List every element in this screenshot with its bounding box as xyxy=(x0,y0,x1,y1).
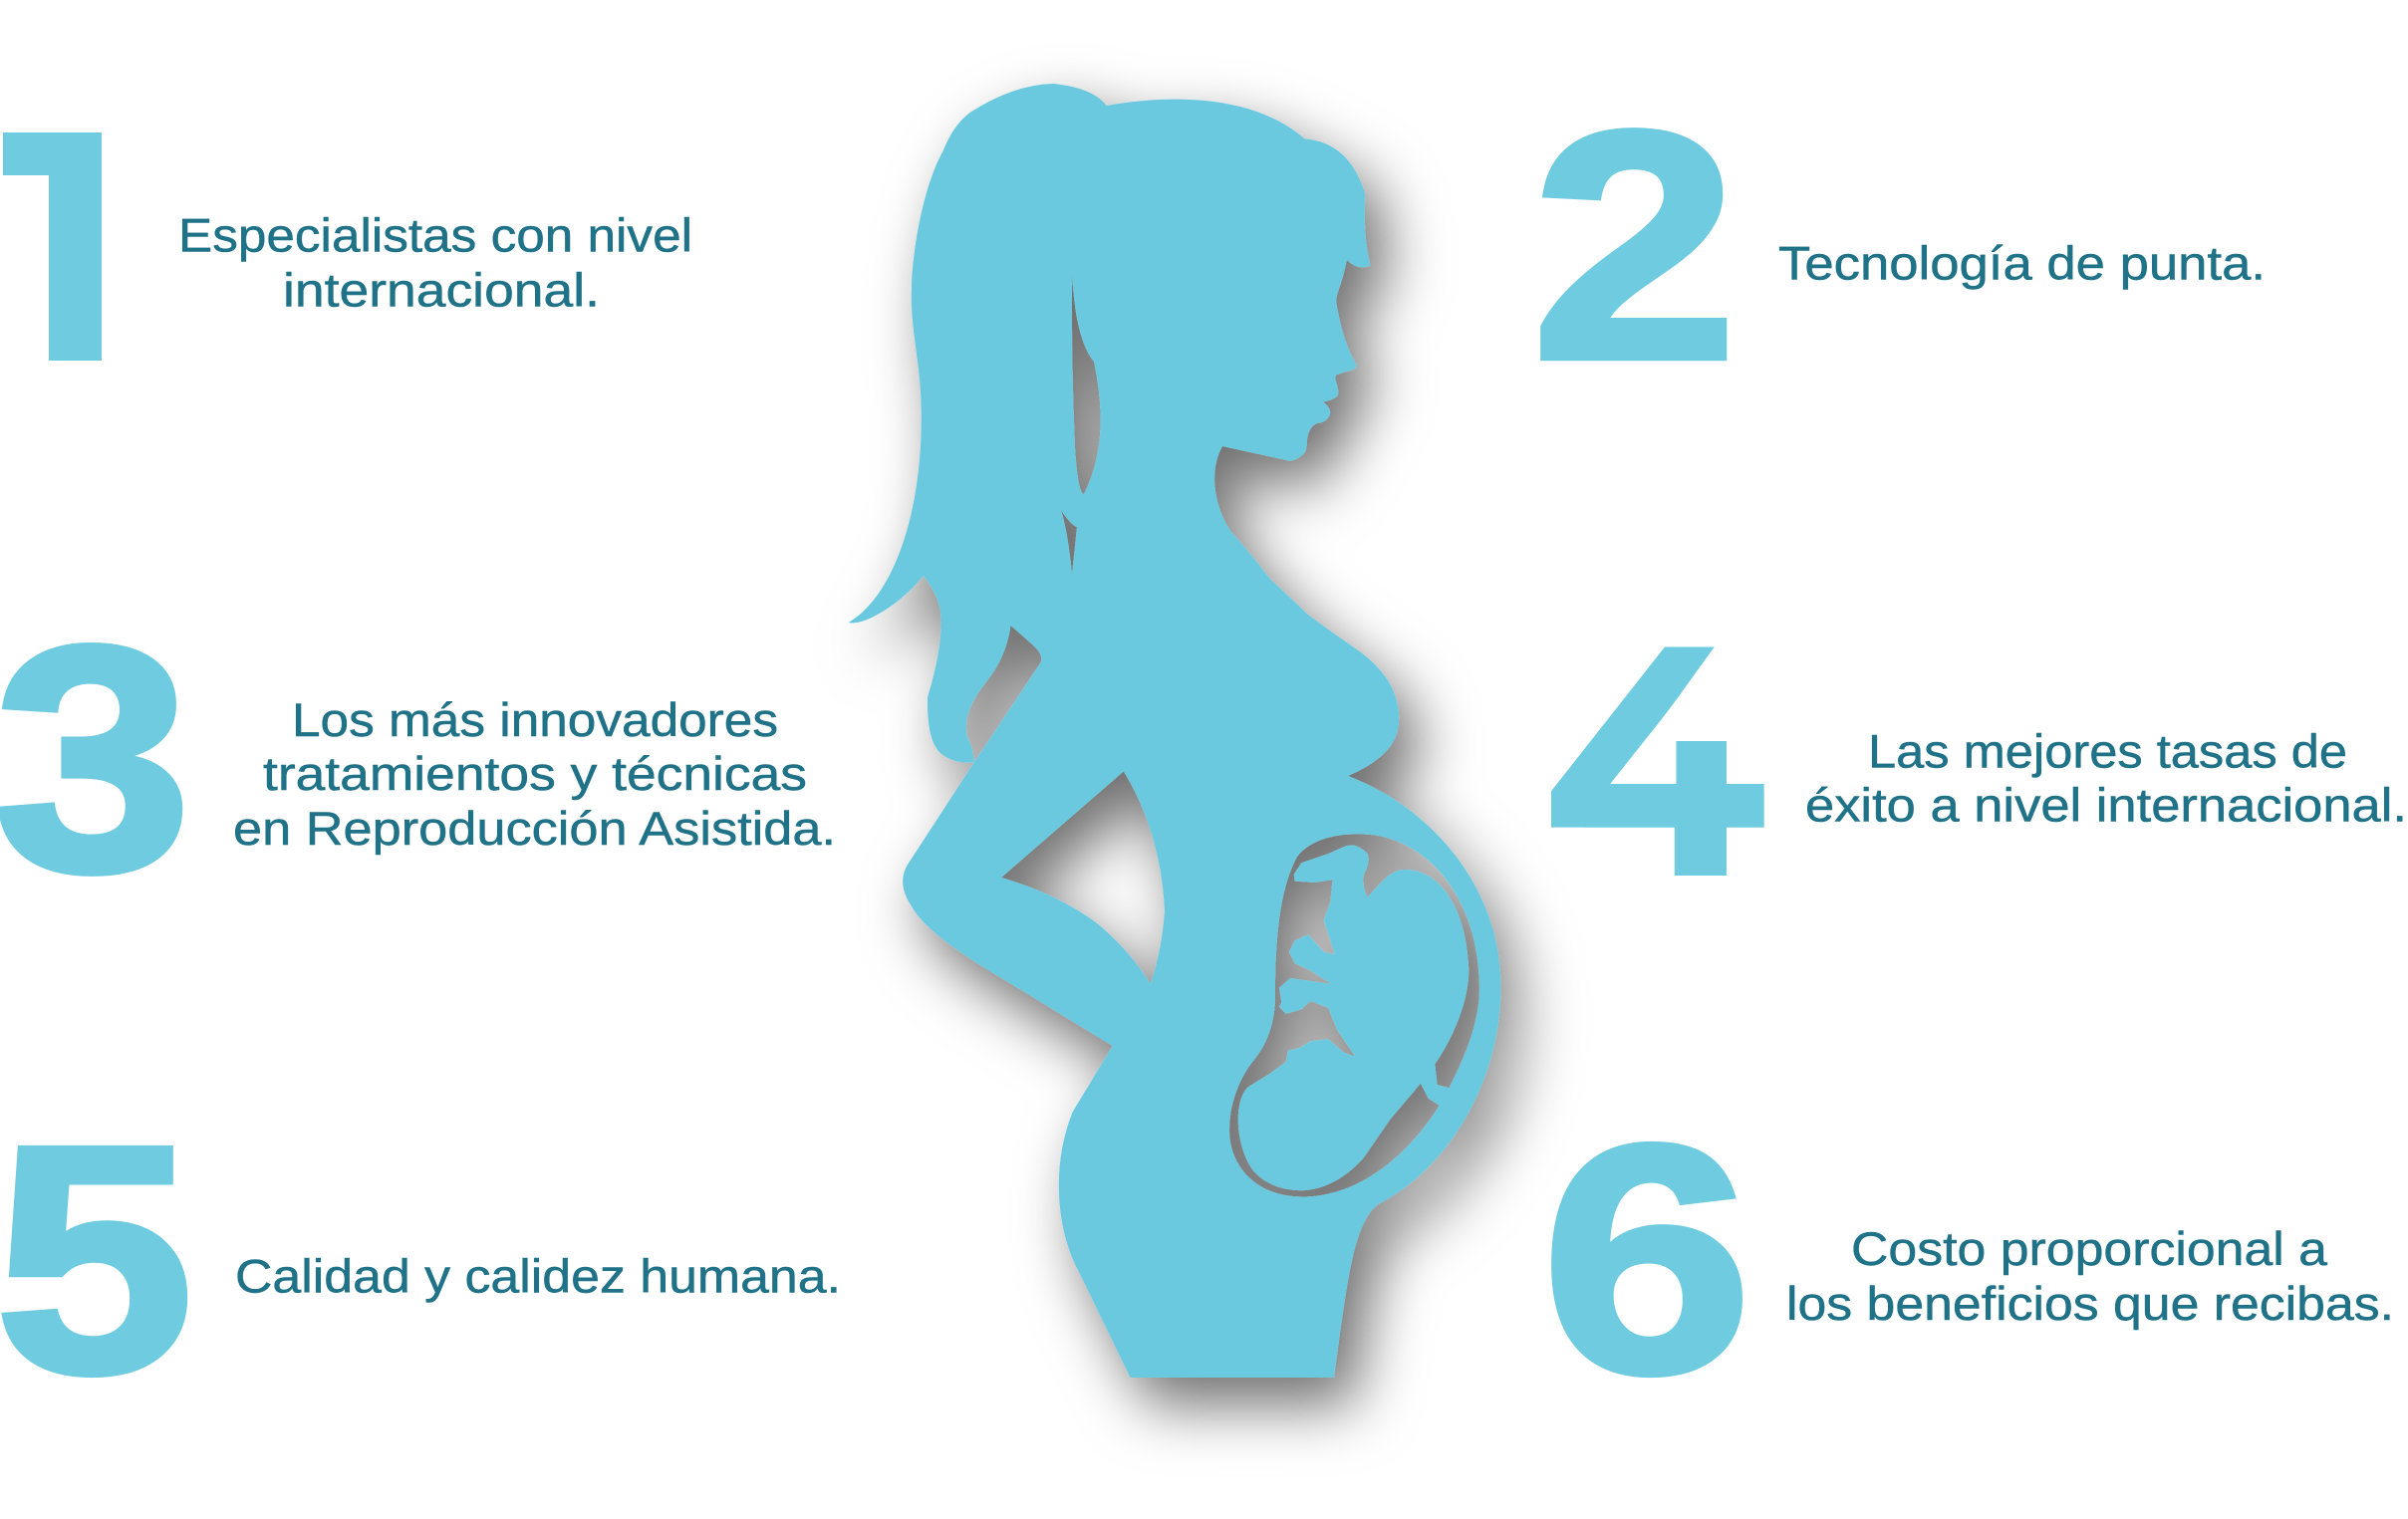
text: item 3 xyxy=(233,693,836,855)
text: item 6: Costo proporcional a xyxy=(1851,1222,2328,1275)
text: item 2: Tecnología de punta. xyxy=(1778,237,2266,290)
text: item 6 xyxy=(1786,1222,2394,1330)
text: item 3: Los más innovadores xyxy=(292,693,778,746)
text: item 4 xyxy=(1805,724,2407,831)
text: item 6: los beneficios que recibas. xyxy=(1786,1277,2394,1330)
number 5: 5 xyxy=(0,1079,194,1440)
text: item 3: en Reproducción Asistida. xyxy=(233,802,836,855)
number 4 xyxy=(1551,647,1764,876)
text: item 4: éxito a nivel internacional. xyxy=(1805,779,2407,831)
text: item 1 xyxy=(178,209,692,317)
text: item 4: Las mejores tasas de xyxy=(1868,724,2347,777)
text: item 1: Especialistas con nivel xyxy=(178,209,692,261)
number 2: 2 xyxy=(1531,65,1738,427)
text: item 3: tratamientos y técnicas xyxy=(263,747,807,800)
figure: pregnant woman silhouette with fetus xyxy=(849,84,1500,1378)
number 6: 6 xyxy=(1541,1078,1752,1441)
number 1 xyxy=(3,132,102,361)
number 4: 4 xyxy=(1548,581,1767,942)
text: item 5: Calidad y calidez humana. xyxy=(235,1250,841,1303)
text: item 1: internacional. xyxy=(283,264,600,317)
